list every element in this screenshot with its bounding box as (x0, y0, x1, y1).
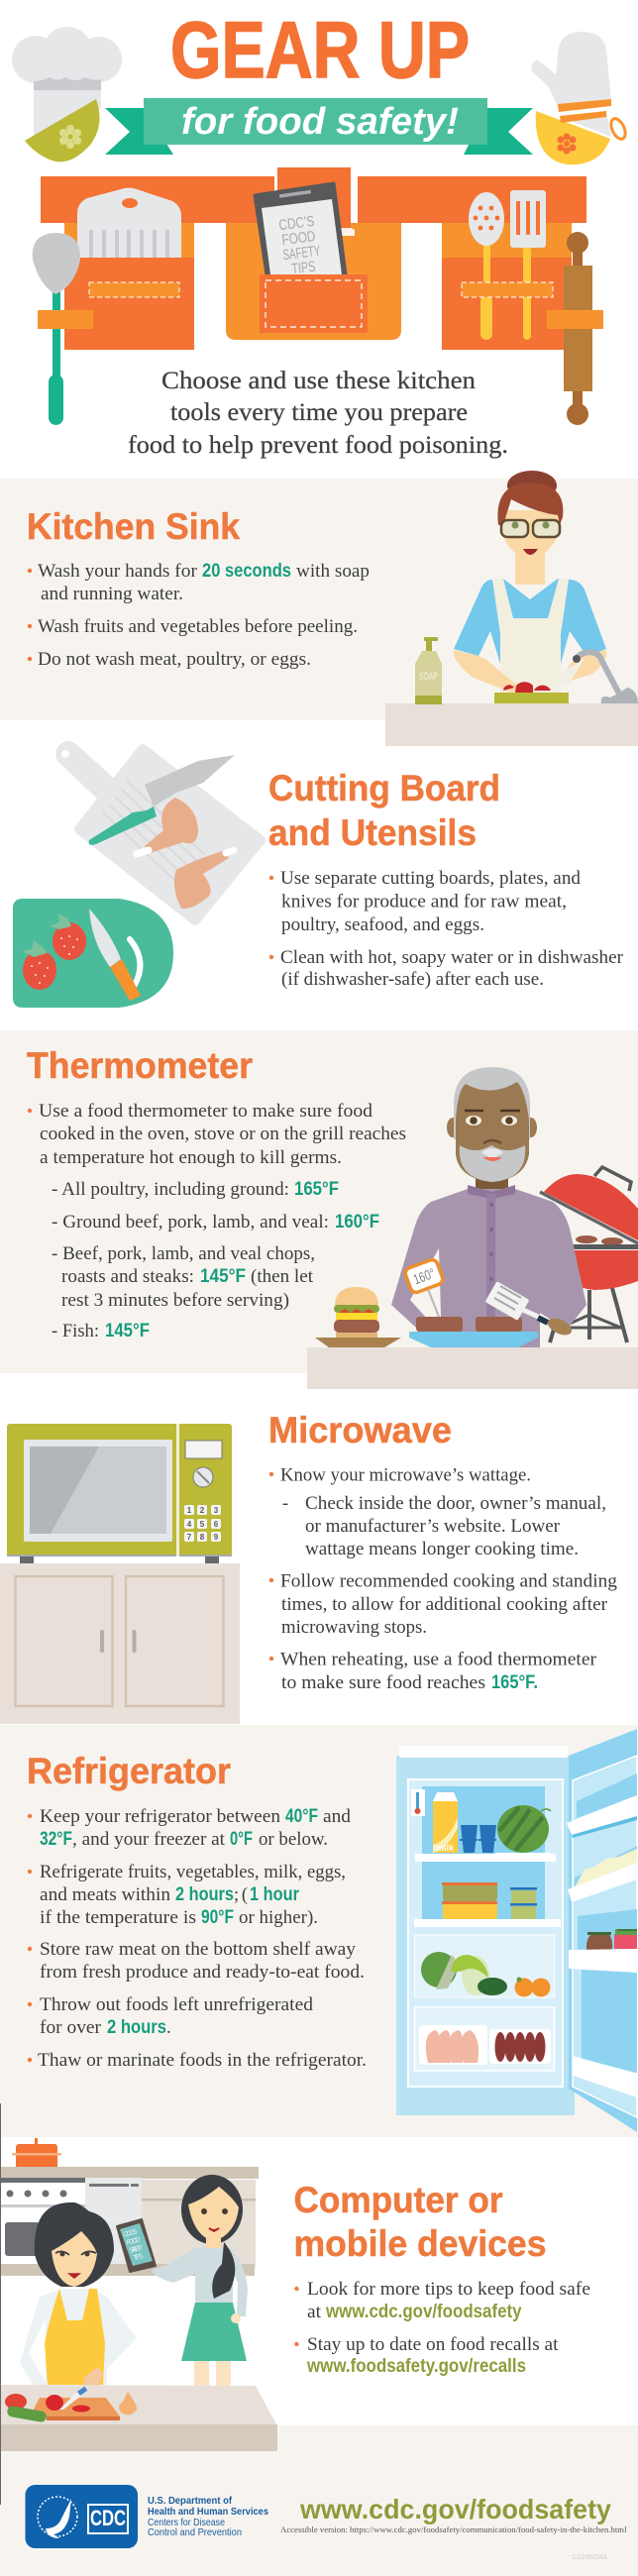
panel: microwave (0, 1410, 617, 1724)
microwave tips: Know your microwave’s wattage. (280, 1466, 531, 1486)
intro text: tools every time you prepare (170, 399, 468, 426)
center pouch: CDC’S (278, 213, 315, 234)
panel: cutting board (13, 741, 623, 1008)
thermometer tips: cooked in the oven, stove or on the grill reaches (40, 1125, 406, 1144)
device tips: at (307, 2303, 322, 2322)
illustration: cutting board with chicken (55, 741, 261, 920)
microwave tips: wattage means longer cooking time. (305, 1540, 579, 1559)
cutting board with vegetables (5, 2387, 137, 2422)
cutting board tips: Clean with hot, soapy water or in dishwasher (280, 948, 623, 968)
illustration: microwave oven: 9 (214, 1533, 219, 1542)
icon: oven mitt and bowl (531, 32, 628, 164)
agency name (148, 2495, 268, 2538)
icon: spatula (485, 1281, 575, 1339)
kitchen sink tips: and running water. (41, 585, 183, 604)
icon: pot (12, 2138, 61, 2183)
thermometer tips: 145°F (105, 1321, 150, 1342)
refrigerator tips: or below. (259, 1830, 328, 1850)
icon: raw seafood and meat (419, 2025, 551, 2065)
refrigerator tips: and (323, 1807, 352, 1827)
kitchen sink tips (28, 561, 370, 670)
intro text (128, 368, 508, 459)
illustration: kitchen scene with two women (0, 2138, 277, 2451)
icon: soap bottle: SOAP (419, 671, 438, 683)
icon: food thermometer (404, 1258, 444, 1317)
refrigerator tips: 90°F (201, 1907, 234, 1928)
kitchen sink tips: Wash fruits and vegetables before peeling. (38, 617, 358, 637)
banner: for food safety: for food safety! (181, 101, 459, 143)
heading: computer or mobile devices: Computer or (293, 2180, 503, 2220)
center pouch: FOOD (281, 228, 316, 249)
tool belt (41, 167, 586, 350)
right pouch (442, 190, 572, 350)
thermometer tips: 145°F (200, 1266, 246, 1287)
thermometer tips: 160°F (335, 1212, 379, 1233)
icon: tablet (117, 2219, 156, 2272)
kitchen sink tips: with soap (296, 562, 370, 582)
refrigerator tips (28, 1806, 367, 2071)
microwave tips: times, to allow for additional cooking after (281, 1595, 607, 1615)
refrigerator tips: 1 hour (250, 1884, 300, 1905)
center pouch (226, 167, 401, 340)
accessible version note: Accessible version: https://www.cdc.gov/foodsafety/communication/food-safety-in-the-kitchen.html (280, 2524, 627, 2534)
illustration: microwave oven: 5 (200, 1520, 205, 1529)
refrigerator tips: 2 hours (175, 1884, 234, 1905)
illustration: microwave oven (7, 1424, 232, 1563)
illustration: man with thermometer (391, 1067, 586, 1347)
cutting board tips: knives for produce and for raw meat, (281, 892, 567, 912)
thermometer tips: - All poultry, including ground: (52, 1180, 289, 1200)
refrigerator tips: if the temperature is (40, 1908, 196, 1928)
panel: computer or mobile devices (0, 2138, 590, 2451)
microwave tips: - (282, 1494, 288, 1514)
panel: refrigerator (0, 1725, 638, 2137)
publication code: CS298054A (573, 2554, 607, 2561)
heading: cutting board and utensils (268, 768, 500, 853)
kitchen sink tips: Do not wash meat, poultry, or eggs. (38, 650, 311, 670)
illustration: green board with strawberries (13, 899, 173, 1008)
counter (0, 2385, 276, 2424)
icon: soap bottle (415, 637, 442, 704)
icon: fridge thermometer (411, 1789, 425, 1816)
agency name: U.S. Department of (148, 2495, 232, 2507)
illustration: microwave oven: 3 (214, 1506, 219, 1515)
center pouch: TIPS (291, 259, 316, 277)
panel: thermometer (0, 1030, 638, 1389)
microwave tips: or manufacturer’s website. Lower (305, 1517, 560, 1537)
refrigerator tips: and meats within (40, 1885, 170, 1905)
icon: tablet: CDC’S (123, 2228, 139, 2239)
left pouch (64, 188, 194, 350)
microwave tips: microwaving stops. (281, 1618, 427, 1638)
icon: tablet: FOOD (126, 2236, 141, 2247)
icon: food containers (442, 1882, 537, 1919)
microwave tips: to make sure food reaches (281, 1673, 485, 1693)
device tips: www.cdc.gov/foodsafety (325, 2302, 522, 2322)
agency name: Health and Human Services (148, 2506, 268, 2518)
fridge door (567, 1729, 637, 2132)
refrigerator tips: for over (40, 2018, 101, 2038)
device tips (294, 2280, 590, 2377)
cutting board tips: poultry, seafood, and eggs. (281, 915, 484, 935)
refrigerator tips: Thaw or marinate foods in the refrigerator. (38, 2051, 367, 2071)
heading: cutting board and utensils: Cutting Board (268, 768, 500, 808)
thermometer tips: rest 3 minutes before serving) (61, 1291, 289, 1311)
illustration: open refrigerator (396, 1729, 637, 2132)
banner: for food safety (105, 98, 533, 155)
cutting board tips: (if dishwasher-safe) after each use. (281, 970, 544, 990)
refrigerator tips: ; ( (234, 1885, 248, 1905)
device tips: Stay up to date on food recalls at (307, 2335, 559, 2355)
illustration: microwave oven: 8 (200, 1533, 205, 1542)
thermometer tips: (then let (251, 1267, 314, 1287)
website: www.cdc.gov/foodsafety (299, 2494, 611, 2524)
illustration: woman washing fruit (385, 471, 638, 746)
illustration: microwave oven: 1 (187, 1506, 192, 1515)
microwave tips (269, 1466, 617, 1693)
refrigerator tips: Throw out foods left unrefrigerated (40, 1995, 314, 2015)
refrigerator tips: from fresh produce and ready-to-eat food. (40, 1963, 365, 1983)
illustration: microwave oven: 4 (187, 1520, 192, 1529)
cutting board tips (269, 869, 623, 990)
heading: cutting board and utensils: and Utensils (268, 812, 477, 853)
illustration: burger on plate (315, 1287, 401, 1347)
icon: milk carton: milk (436, 1843, 455, 1853)
heading: thermometer: Thermometer (27, 1045, 253, 1086)
icon: watermelon (495, 1805, 551, 1855)
refrigerator tips: 0°F (230, 1829, 253, 1850)
thermometer tips: - Fish: (52, 1322, 99, 1342)
icon: food thermometer: 160° (411, 1265, 437, 1287)
refrigerator tips: . (166, 2018, 171, 2038)
counter (307, 1347, 638, 1389)
microwave tips: Follow recommended cooking and standing (280, 1571, 617, 1591)
icon: blue cups (460, 1825, 496, 1853)
logo: HHS and CDC (26, 2485, 138, 2548)
heading: microwave: Microwave (268, 1410, 452, 1450)
illustration: microwave oven: 7 (187, 1533, 192, 1542)
kitchen sink tips: 20 seconds (202, 561, 291, 582)
agency name: Centers for Disease (148, 2517, 225, 2528)
thermometer tips: Use a food thermometer to make sure food (39, 1102, 373, 1122)
heading: computer or mobile devices (293, 2180, 547, 2264)
panel: kitchen sink (0, 471, 638, 746)
thermometer tips: - Beef, pork, lamb, and veal chops, (52, 1244, 315, 1264)
refrigerator tips: 2 hours (107, 2017, 166, 2038)
refrigerator tips: Keep your refrigerator between (40, 1807, 280, 1827)
refrigerator tips: 32°F (40, 1829, 72, 1850)
microwave tips: When reheating, use a food thermometer (280, 1651, 596, 1670)
device tips: www.foodsafety.gov/recalls (306, 2356, 526, 2377)
thermometer tips: roasts and steaks: (61, 1267, 194, 1287)
device tips: Look for more tips to keep food safe (307, 2280, 590, 2300)
kitchen sink tips: Wash your hands for (38, 562, 197, 582)
thermometer tips: a temperature hot enough to kill germs. (40, 1148, 342, 1168)
icon: tablet: SAFETY (129, 2244, 145, 2255)
illustration: grill (540, 1167, 638, 1342)
illustration: microwave oven: 6 (214, 1520, 219, 1529)
icon: chef hat and bowl (12, 27, 122, 161)
thermometer tips: - Ground beef, pork, lamb, and veal: (52, 1213, 329, 1233)
refrigerator tips: 40°F (285, 1806, 318, 1827)
refrigerator tips: Refrigerate fruits, vegetables, milk, eggs, (40, 1863, 346, 1882)
title: GEAR UP (170, 6, 470, 95)
illustration: cabinet (0, 1563, 240, 1724)
icon: tablet: TIPS (133, 2253, 145, 2262)
logo: HHS and CDC: CDC (90, 2506, 126, 2530)
intro text: food to help prevent food poisoning. (128, 432, 508, 459)
intro text: Choose and use these kitchen (161, 368, 477, 394)
counter (385, 703, 638, 746)
thermometer tips (28, 1102, 406, 1342)
refrigerator tips: Store raw meat on the bottom shelf away (40, 1940, 357, 1960)
refrigerator tips: or higher). (239, 1908, 318, 1928)
thermometer tips: 165°F (294, 1179, 339, 1200)
icon: rolling pin (547, 232, 603, 425)
woman cutting tomato (20, 2202, 137, 2400)
icon: milk carton (433, 1792, 458, 1853)
cutting board tips: Use separate cutting boards, plates, and (280, 869, 582, 889)
heading: computer or mobile devices: mobile devices (293, 2223, 547, 2264)
heading: refrigerator: Refrigerator (27, 1751, 231, 1791)
illustration: microwave oven: 2 (200, 1506, 205, 1515)
refrigerator tips: , and your freezer at (72, 1830, 226, 1850)
icon: ladle (33, 233, 93, 425)
microwave tips: 165°F. (491, 1672, 538, 1693)
center pouch: SAFETY (282, 243, 321, 264)
microwave tips: Check inside the door, owner’s manual, (305, 1494, 606, 1514)
panel: footer (0, 2425, 638, 2576)
woman holding tablet (117, 2175, 248, 2387)
icon: vegetables and oranges (421, 1952, 551, 1997)
heading: kitchen sink: Kitchen Sink (27, 506, 240, 547)
agency name: Control and Prevention (148, 2526, 242, 2538)
